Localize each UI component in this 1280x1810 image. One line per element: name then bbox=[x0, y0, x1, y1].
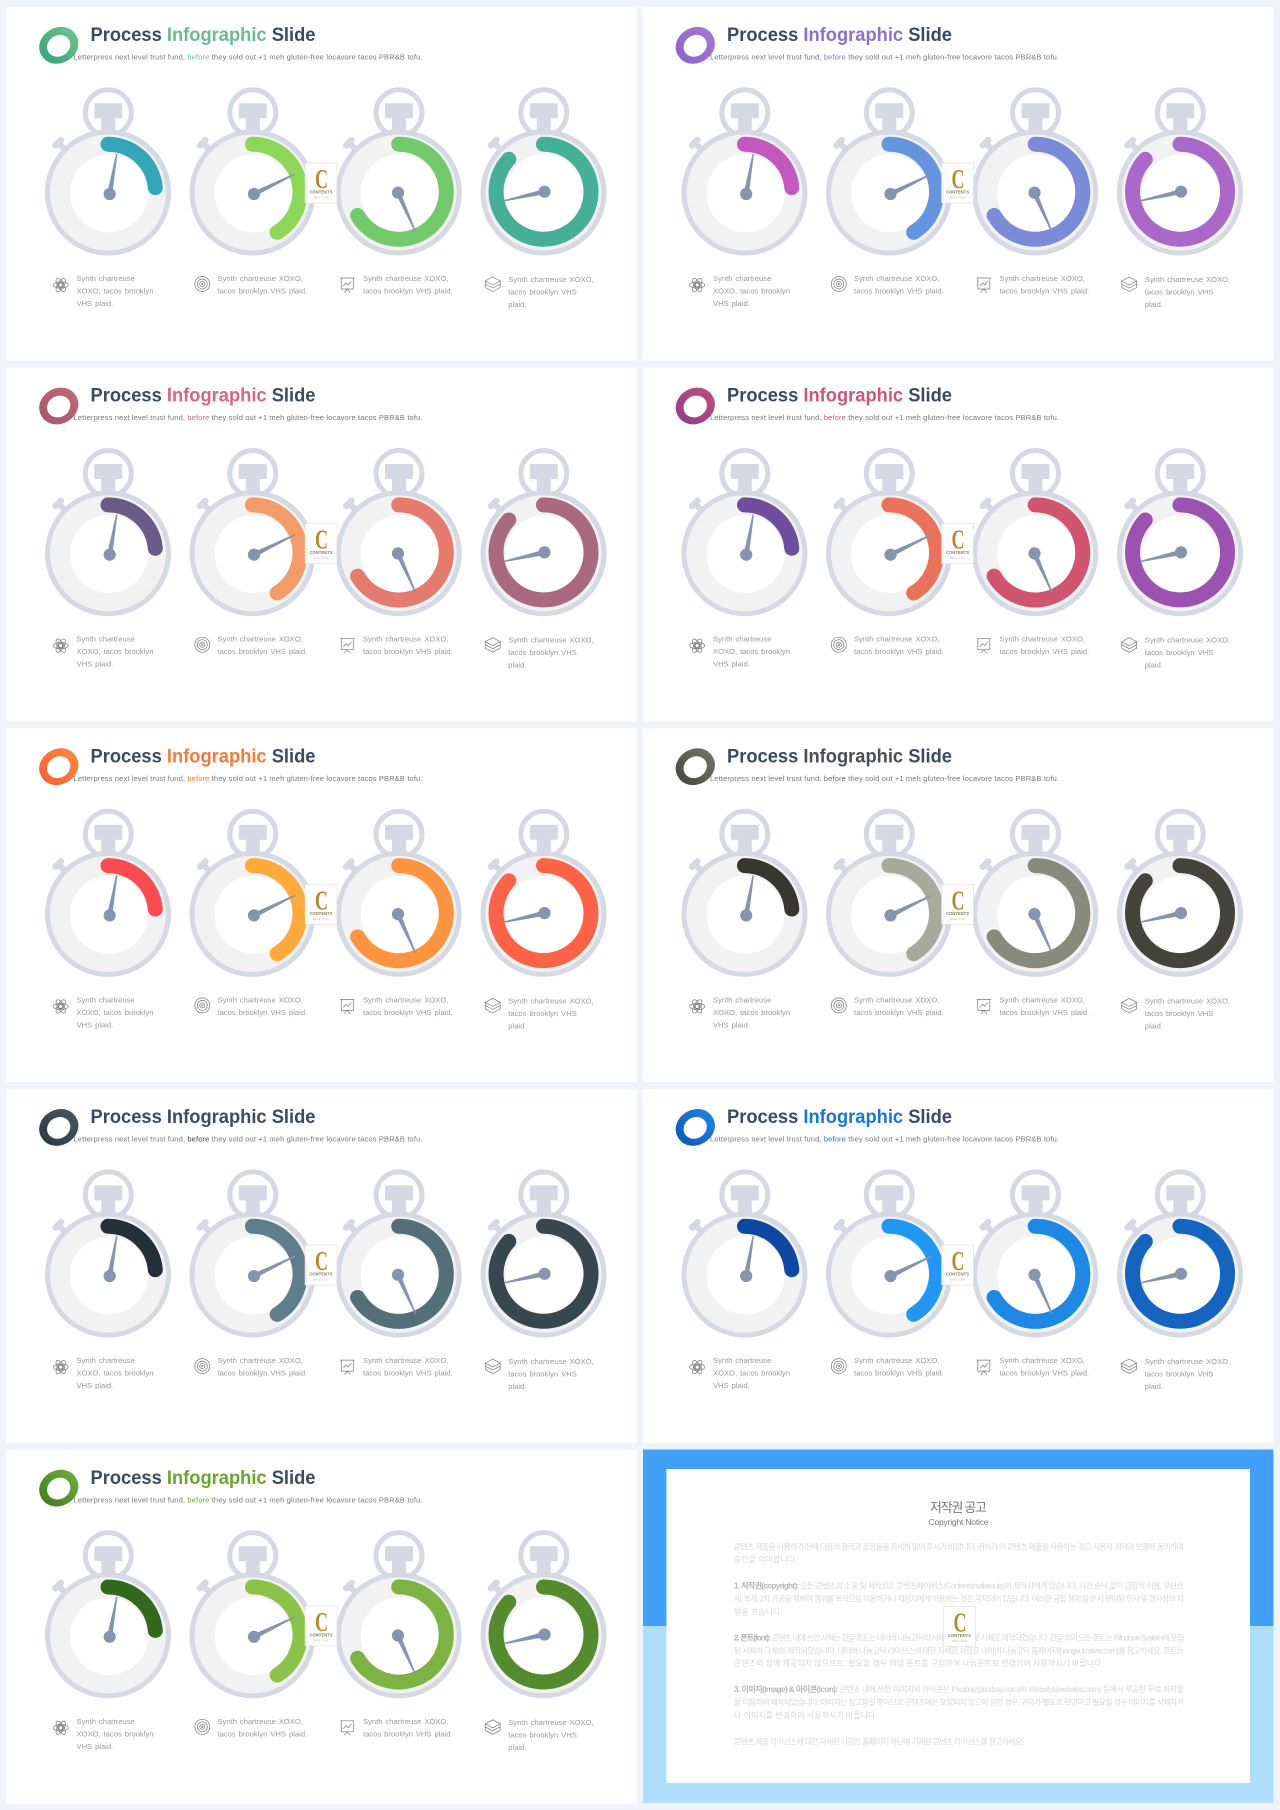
notice intro: 승인을 의미합니다. bbox=[734, 1554, 797, 1564]
caption 2: Synth chartreuse XOXO, bbox=[218, 274, 303, 283]
stopwatch 3 bbox=[975, 1172, 1096, 1335]
notice subtitle: Copyright Notice bbox=[928, 1517, 989, 1527]
caption 4: tacos brooklyn VHS bbox=[1145, 1370, 1213, 1379]
caption 3: tacos brooklyn VHS plaid. bbox=[363, 1729, 453, 1738]
caption 3: tacos brooklyn VHS plaid. bbox=[363, 647, 453, 656]
heading: Process Infographic Slide bbox=[90, 1107, 315, 1128]
caption 3: Synth chartreuse XOXO, bbox=[363, 274, 448, 283]
caption 3: tacos brooklyn VHS plaid. bbox=[363, 286, 453, 296]
caption 3: tacos brooklyn VHS plaid. bbox=[363, 1369, 453, 1378]
caption 2: tacos brooklyn VHS plaid. bbox=[854, 1008, 944, 1017]
stopwatch 4 bbox=[483, 1533, 604, 1696]
caption 1: VHS plaid. bbox=[76, 1381, 113, 1390]
notice section 1: 벌을 받습니다. bbox=[734, 1606, 783, 1616]
notice section 1: 재, 복제, 2차 가공을 위하여 행위를 목적으로 이용하거나 제삼자에게 이용하는 것은 금지되어 있습니다. 이러한 금합 행위 발견 시 관련된 민사 및 형사상의 처 bbox=[734, 1594, 1184, 1604]
stopwatch 2 bbox=[192, 1172, 313, 1335]
caption 4: plaid. bbox=[1145, 1021, 1163, 1030]
caption 1: VHS plaid. bbox=[76, 299, 113, 308]
heading: Process Infographic Slide bbox=[727, 746, 952, 767]
panel: purple process slide bbox=[642, 7, 1274, 361]
caption 3: Synth chartreuse XOXO, bbox=[363, 635, 448, 644]
caption 1: Synth chartreuse bbox=[76, 274, 135, 283]
icon: atom bbox=[690, 998, 705, 1014]
icon: layers bbox=[485, 638, 500, 652]
notice intro: 콘텐츠 제품을 사용하기 전에 다음의 항목과 조항들을 자세히 읽어 주시기 바랍니다. 귀하가 이 콘텐츠 제품을 사용하는 것은 사용자 계약과 보증에 동의하여 bbox=[734, 1542, 1184, 1552]
stopwatch 1 bbox=[48, 1172, 168, 1335]
caption 3: Synth chartreuse XOXO, bbox=[1000, 635, 1085, 644]
caption 4: plaid. bbox=[508, 1743, 526, 1752]
icon: atom bbox=[690, 638, 705, 654]
watermark bbox=[305, 163, 337, 203]
heading: Process Infographic Slide bbox=[90, 1468, 315, 1489]
caption 4: plaid. bbox=[508, 661, 526, 670]
icon: target bbox=[195, 276, 210, 292]
icon: logo ring bbox=[676, 388, 715, 424]
icon: target bbox=[195, 1359, 210, 1374]
icon: target bbox=[831, 998, 846, 1013]
caption 4: tacos brooklyn VHS bbox=[508, 648, 577, 657]
icon: logo ring bbox=[676, 1109, 715, 1146]
stopwatch 3 bbox=[338, 811, 459, 974]
caption 4: Synth chartreuse XOXO, bbox=[1145, 996, 1230, 1005]
icon: target bbox=[195, 998, 210, 1013]
subtitle: Letterpress next level trust fund, before they sold out +1 meh gluten-free locavore tacos PBR&B tofu. bbox=[74, 1495, 422, 1504]
caption 1: Synth chartreuse bbox=[713, 995, 771, 1004]
watermark bbox=[942, 884, 974, 924]
stopwatch 1 bbox=[684, 811, 805, 974]
caption 4: plaid. bbox=[1145, 661, 1163, 670]
icon: presentation board bbox=[340, 639, 354, 653]
stopwatch 3 bbox=[975, 90, 1096, 253]
caption 3: Synth chartreuse XOXO, bbox=[1000, 274, 1085, 283]
caption 2: Synth chartreuse XOXO, bbox=[218, 1717, 303, 1726]
subtitle: Letterpress next level trust fund, before they sold out +1 meh gluten-free locavore tacos PBR&B tofu. bbox=[74, 774, 422, 783]
caption 1: VHS plaid. bbox=[76, 1742, 113, 1751]
stopwatch 3 bbox=[975, 811, 1096, 974]
caption 4: plaid. bbox=[1145, 300, 1163, 309]
icon: layers bbox=[1122, 638, 1137, 652]
notice section 3: 을 이용하여 제작되었습니다. 이미지는 참고용일 뿐이므로 콘텐츠에는 포함되지 않으며 원한 경우, 귀하가 별도로 확인하고 필요할 경우 이미지를 삭제하거 bbox=[734, 1697, 1184, 1707]
heading: Process Infographic Slide bbox=[90, 386, 315, 407]
heading: Process Infographic Slide bbox=[90, 746, 315, 767]
stopwatch 3 bbox=[338, 1533, 459, 1696]
caption 4: plaid. bbox=[508, 1021, 526, 1030]
watermark bbox=[942, 1245, 974, 1285]
caption 2: tacos brooklyn VHS plaid. bbox=[854, 286, 944, 296]
caption 4: plaid. bbox=[1145, 1382, 1163, 1391]
caption 1: VHS plaid. bbox=[713, 1020, 750, 1029]
notice section 3: 3. 이미지(image) & 아이콘(icon): 콘텐츠 내에 쓰인 이미지와 아이콘은 Pixabay(pixabay.com)와 Webalys(webalys.com) 등에서 제공한 무료 저작물 bbox=[734, 1685, 1184, 1694]
caption 3: tacos brooklyn VHS plaid. bbox=[363, 1008, 453, 1017]
caption 3: Synth chartreuse XOXO, bbox=[1000, 995, 1085, 1004]
caption 2: tacos brooklyn VHS plaid. bbox=[218, 647, 307, 656]
icon: atom bbox=[53, 277, 68, 293]
watermark bbox=[305, 524, 337, 564]
stopwatch 1 bbox=[684, 90, 805, 253]
stopwatch 4 bbox=[483, 90, 604, 253]
caption 4: Synth chartreuse XOXO, bbox=[1145, 1357, 1230, 1366]
icon: logo ring bbox=[39, 388, 78, 424]
icon: atom bbox=[690, 1359, 705, 1375]
icon: atom bbox=[53, 638, 68, 654]
icon: logo ring bbox=[676, 27, 715, 64]
subtitle: Letterpress next level trust fund, before they sold out +1 meh gluten-free locavore tacos PBR&B tofu. bbox=[74, 1135, 422, 1144]
caption 1: Synth chartreuse bbox=[76, 1717, 135, 1726]
icon: layers bbox=[485, 277, 500, 292]
caption 4: Synth chartreuse XOXO, bbox=[508, 1357, 594, 1366]
stopwatch 1 bbox=[48, 1533, 168, 1696]
icon: target bbox=[195, 637, 210, 652]
stopwatch 2 bbox=[192, 1533, 313, 1696]
notice footer: 콘텐츠 제품 라이선스에 대한 자세한 사항은 홈페이지 하단에 기재된 콘텐츠 라이선스를 참고하세요. bbox=[734, 1736, 1024, 1746]
caption 4: Synth chartreuse XOXO, bbox=[1145, 636, 1230, 645]
caption 1: VHS plaid. bbox=[76, 660, 113, 669]
panel: slate process slide bbox=[6, 1089, 637, 1443]
caption 2: Synth chartreuse XOXO, bbox=[854, 635, 939, 644]
watermark bbox=[305, 1606, 337, 1646]
caption 2: Synth chartreuse XOXO, bbox=[218, 995, 303, 1004]
stopwatch 4 bbox=[483, 811, 604, 974]
caption 1: XOXO, tacos brooklyn bbox=[76, 1729, 153, 1738]
watermark bbox=[944, 1607, 976, 1647]
icon: atom bbox=[53, 1720, 68, 1736]
stopwatch 1 bbox=[48, 450, 168, 614]
caption 4: Synth chartreuse XOXO, bbox=[1145, 275, 1230, 284]
caption 2: Synth chartreuse XOXO, bbox=[854, 1356, 939, 1365]
caption 1: XOXO, tacos brooklyn bbox=[76, 1369, 153, 1378]
heading: Process Infographic Slide bbox=[90, 25, 315, 46]
stopwatch 1 bbox=[48, 811, 168, 974]
stopwatch 2 bbox=[828, 811, 950, 974]
stopwatch 2 bbox=[828, 450, 950, 614]
caption 1: Synth chartreuse bbox=[713, 274, 771, 283]
caption 1: Synth chartreuse bbox=[76, 1356, 135, 1365]
icon: logo ring bbox=[39, 1109, 78, 1146]
caption 3: tacos brooklyn VHS plaid. bbox=[1000, 286, 1089, 296]
subtitle: Letterpress next level trust fund, before they sold out +1 meh gluten-free locavore tacos PBR&B tofu. bbox=[710, 413, 1059, 422]
caption 1: VHS plaid. bbox=[713, 1381, 750, 1390]
icon: atom bbox=[53, 998, 68, 1014]
stopwatch 3 bbox=[338, 1172, 459, 1335]
watermark bbox=[942, 163, 974, 203]
caption 3: Synth chartreuse XOXO, bbox=[363, 1717, 448, 1726]
caption 1: VHS plaid. bbox=[713, 299, 750, 308]
watermark bbox=[305, 884, 337, 924]
caption 1: XOXO, tacos brooklyn bbox=[76, 286, 153, 296]
caption 2: tacos brooklyn VHS plaid. bbox=[854, 1369, 944, 1378]
notice section 2: 2. 폰트(font): 콘텐츠 내에 쓰인 서체는 한글 폰트는 네이버 나눔고딕의 서체입니다. 영문 서체로 제작되었습니다. 한글 외의 모든 폰트는 Windows System에 포함 bbox=[734, 1634, 1184, 1642]
heading: Process Infographic Slide bbox=[727, 386, 952, 407]
stopwatch 2 bbox=[828, 90, 950, 253]
stopwatch 2 bbox=[192, 450, 313, 614]
caption 4: tacos brooklyn VHS bbox=[508, 1009, 577, 1018]
icon: presentation board bbox=[340, 278, 354, 292]
panel: leaf green process slide bbox=[6, 1450, 637, 1804]
caption 1: XOXO, tacos brooklyn bbox=[713, 1369, 790, 1378]
icon: logo ring bbox=[39, 748, 78, 785]
caption 4: Synth chartreuse XOXO, bbox=[508, 275, 594, 284]
caption 1: Synth chartreuse bbox=[713, 1356, 771, 1365]
icon: presentation board bbox=[977, 999, 991, 1014]
stopwatch 3 bbox=[975, 450, 1096, 614]
icon: logo ring bbox=[676, 748, 715, 785]
stopwatch 4 bbox=[1120, 811, 1240, 974]
subtitle: Letterpress next level trust fund, before they sold out +1 meh gluten-free locavore tacos PBR&B tofu. bbox=[710, 52, 1059, 62]
subtitle: Letterpress next level trust fund, before they sold out +1 meh gluten-free locavore tacos PBR&B tofu. bbox=[710, 1135, 1059, 1144]
heading: Process Infographic Slide bbox=[727, 25, 952, 46]
stopwatch 4 bbox=[483, 450, 604, 614]
caption 1: Synth chartreuse bbox=[713, 635, 771, 644]
caption 2: Synth chartreuse XOXO, bbox=[218, 635, 303, 644]
stopwatch 4 bbox=[1120, 90, 1240, 253]
subtitle: Letterpress next level trust fund, before they sold out +1 meh gluten-free locavore tacos PBR&B tofu. bbox=[74, 413, 422, 422]
caption 1: XOXO, tacos brooklyn bbox=[713, 286, 790, 296]
icon: presentation board bbox=[340, 999, 354, 1014]
stopwatch 2 bbox=[192, 811, 313, 974]
notice title: 저작권 공고 bbox=[930, 1500, 987, 1515]
caption 4: tacos brooklyn VHS bbox=[508, 288, 577, 296]
icon: presentation board bbox=[340, 1360, 354, 1375]
caption 4: plaid. bbox=[508, 300, 526, 309]
icon: atom bbox=[690, 277, 705, 293]
caption 2: tacos brooklyn VHS plaid. bbox=[854, 647, 944, 656]
caption 2: Synth chartreuse XOXO, bbox=[218, 1356, 303, 1365]
stopwatch 2 bbox=[828, 1172, 950, 1335]
caption 2: tacos brooklyn VHS plaid. bbox=[218, 1008, 307, 1017]
stopwatch 4 bbox=[483, 1172, 604, 1335]
caption 3: tacos brooklyn VHS plaid. bbox=[1000, 1369, 1089, 1378]
icon: layers bbox=[485, 1720, 500, 1734]
caption 2: tacos brooklyn VHS plaid. bbox=[218, 286, 307, 296]
caption 2: Synth chartreuse XOXO, bbox=[854, 995, 939, 1004]
caption 3: Synth chartreuse XOXO, bbox=[363, 1356, 448, 1365]
stopwatch 4 bbox=[1120, 450, 1240, 614]
caption 4: tacos brooklyn VHS bbox=[1145, 1009, 1213, 1018]
stopwatch 1 bbox=[684, 450, 805, 614]
watermark bbox=[305, 1245, 337, 1285]
icon: layers bbox=[1122, 277, 1137, 292]
caption 4: tacos brooklyn VHS bbox=[1145, 288, 1213, 296]
caption 4: plaid. bbox=[508, 1382, 526, 1391]
caption 4: Synth chartreuse XOXO, bbox=[508, 636, 594, 645]
stopwatch 4 bbox=[1120, 1172, 1240, 1335]
stopwatch 1 bbox=[48, 90, 168, 253]
panel: rose process slide bbox=[6, 368, 637, 721]
icon: presentation board bbox=[977, 639, 991, 653]
panel: orange process slide bbox=[6, 728, 637, 1082]
icon: layers bbox=[485, 998, 500, 1013]
icon: logo ring bbox=[39, 1470, 78, 1507]
panel: blue process slide bbox=[642, 1089, 1274, 1443]
caption 3: tacos brooklyn VHS plaid. bbox=[1000, 647, 1089, 656]
caption 4: tacos brooklyn VHS bbox=[508, 1370, 577, 1379]
notice section 3: 나 이미지를 변경하여 사용하시기 바랍니다. bbox=[734, 1710, 878, 1720]
icon: logo ring bbox=[39, 27, 78, 64]
icon: target bbox=[831, 1359, 846, 1374]
icon: presentation board bbox=[977, 278, 991, 292]
caption 1: VHS plaid. bbox=[713, 660, 750, 669]
panel: green process slide bbox=[6, 7, 637, 361]
caption 1: XOXO, tacos brooklyn bbox=[713, 1008, 790, 1017]
panel: olive grey process slide bbox=[642, 728, 1274, 1082]
subtitle: Letterpress next level trust fund, before they sold out +1 meh gluten-free locavore tacos PBR&B tofu. bbox=[710, 774, 1059, 783]
icon: layers bbox=[1122, 1359, 1137, 1374]
caption 1: XOXO, tacos brooklyn bbox=[76, 647, 153, 656]
panel: magenta process slide bbox=[642, 368, 1274, 721]
icon: presentation board bbox=[977, 1360, 991, 1375]
icon: target bbox=[195, 1719, 210, 1734]
heading: Process Infographic Slide bbox=[727, 1107, 952, 1128]
icon: layers bbox=[1122, 998, 1137, 1013]
watermark bbox=[942, 524, 974, 564]
notice section 2: 콘텐츠와 함께 제공되지 않으므로, 필요할 경우 해당 폰트를 구입하여 나눔폰트로 변경하여 사용하시기 바랍니다. bbox=[734, 1658, 1104, 1668]
stopwatch 2 bbox=[192, 90, 313, 253]
caption 3: Synth chartreuse XOXO, bbox=[1000, 1356, 1085, 1365]
caption 4: tacos brooklyn VHS bbox=[508, 1730, 577, 1739]
caption 2: Synth chartreuse XOXO, bbox=[854, 274, 939, 283]
stopwatch 3 bbox=[338, 450, 459, 614]
caption 4: tacos brooklyn VHS bbox=[1145, 648, 1213, 657]
caption 3: tacos brooklyn VHS plaid. bbox=[1000, 1008, 1089, 1017]
icon: atom bbox=[53, 1359, 68, 1375]
notice section 1: 1. 저작권(copyright): 모든 콘텐츠의 소유 및 저작권은 콘텐츠메이커스(Contentsmakeouts)와 제작자에게 있습니다. 사전 승낙 없이 급합적 이용, 무단전 bbox=[734, 1582, 1184, 1590]
caption 1: Synth chartreuse bbox=[76, 995, 135, 1004]
stopwatch 3 bbox=[338, 90, 459, 253]
caption 4: Synth chartreuse XOXO, bbox=[508, 1718, 594, 1727]
caption 1: XOXO, tacos brooklyn bbox=[76, 1008, 153, 1017]
caption 2: tacos brooklyn VHS plaid. bbox=[218, 1729, 307, 1738]
caption 2: tacos brooklyn VHS plaid. bbox=[218, 1369, 307, 1378]
subtitle: Letterpress next level trust fund, before they sold out +1 meh gluten-free locavore tacos PBR&B tofu. bbox=[74, 52, 422, 62]
caption 4: Synth chartreuse XOXO, bbox=[508, 996, 594, 1005]
panel: copyright notice bbox=[643, 1450, 1274, 1803]
caption 1: XOXO, tacos brooklyn bbox=[713, 647, 790, 656]
icon: target bbox=[831, 276, 846, 292]
notice section 2: 된 서체와 그 밖의 제작되었습니다. 네이버 나눔고딕 라이선스에 대한 자세한 사항은 네이버 나눔고딕 홈페이지(hangeul.naver.com)를 참고하세요. 폰트는 bbox=[734, 1646, 1184, 1656]
icon: target bbox=[831, 637, 846, 652]
caption 1: Synth chartreuse bbox=[76, 635, 135, 644]
stopwatch 1 bbox=[684, 1172, 805, 1335]
icon: layers bbox=[485, 1359, 500, 1374]
caption 3: Synth chartreuse XOXO, bbox=[363, 995, 448, 1004]
icon: presentation board bbox=[340, 1721, 354, 1735]
caption 1: VHS plaid. bbox=[76, 1020, 113, 1029]
